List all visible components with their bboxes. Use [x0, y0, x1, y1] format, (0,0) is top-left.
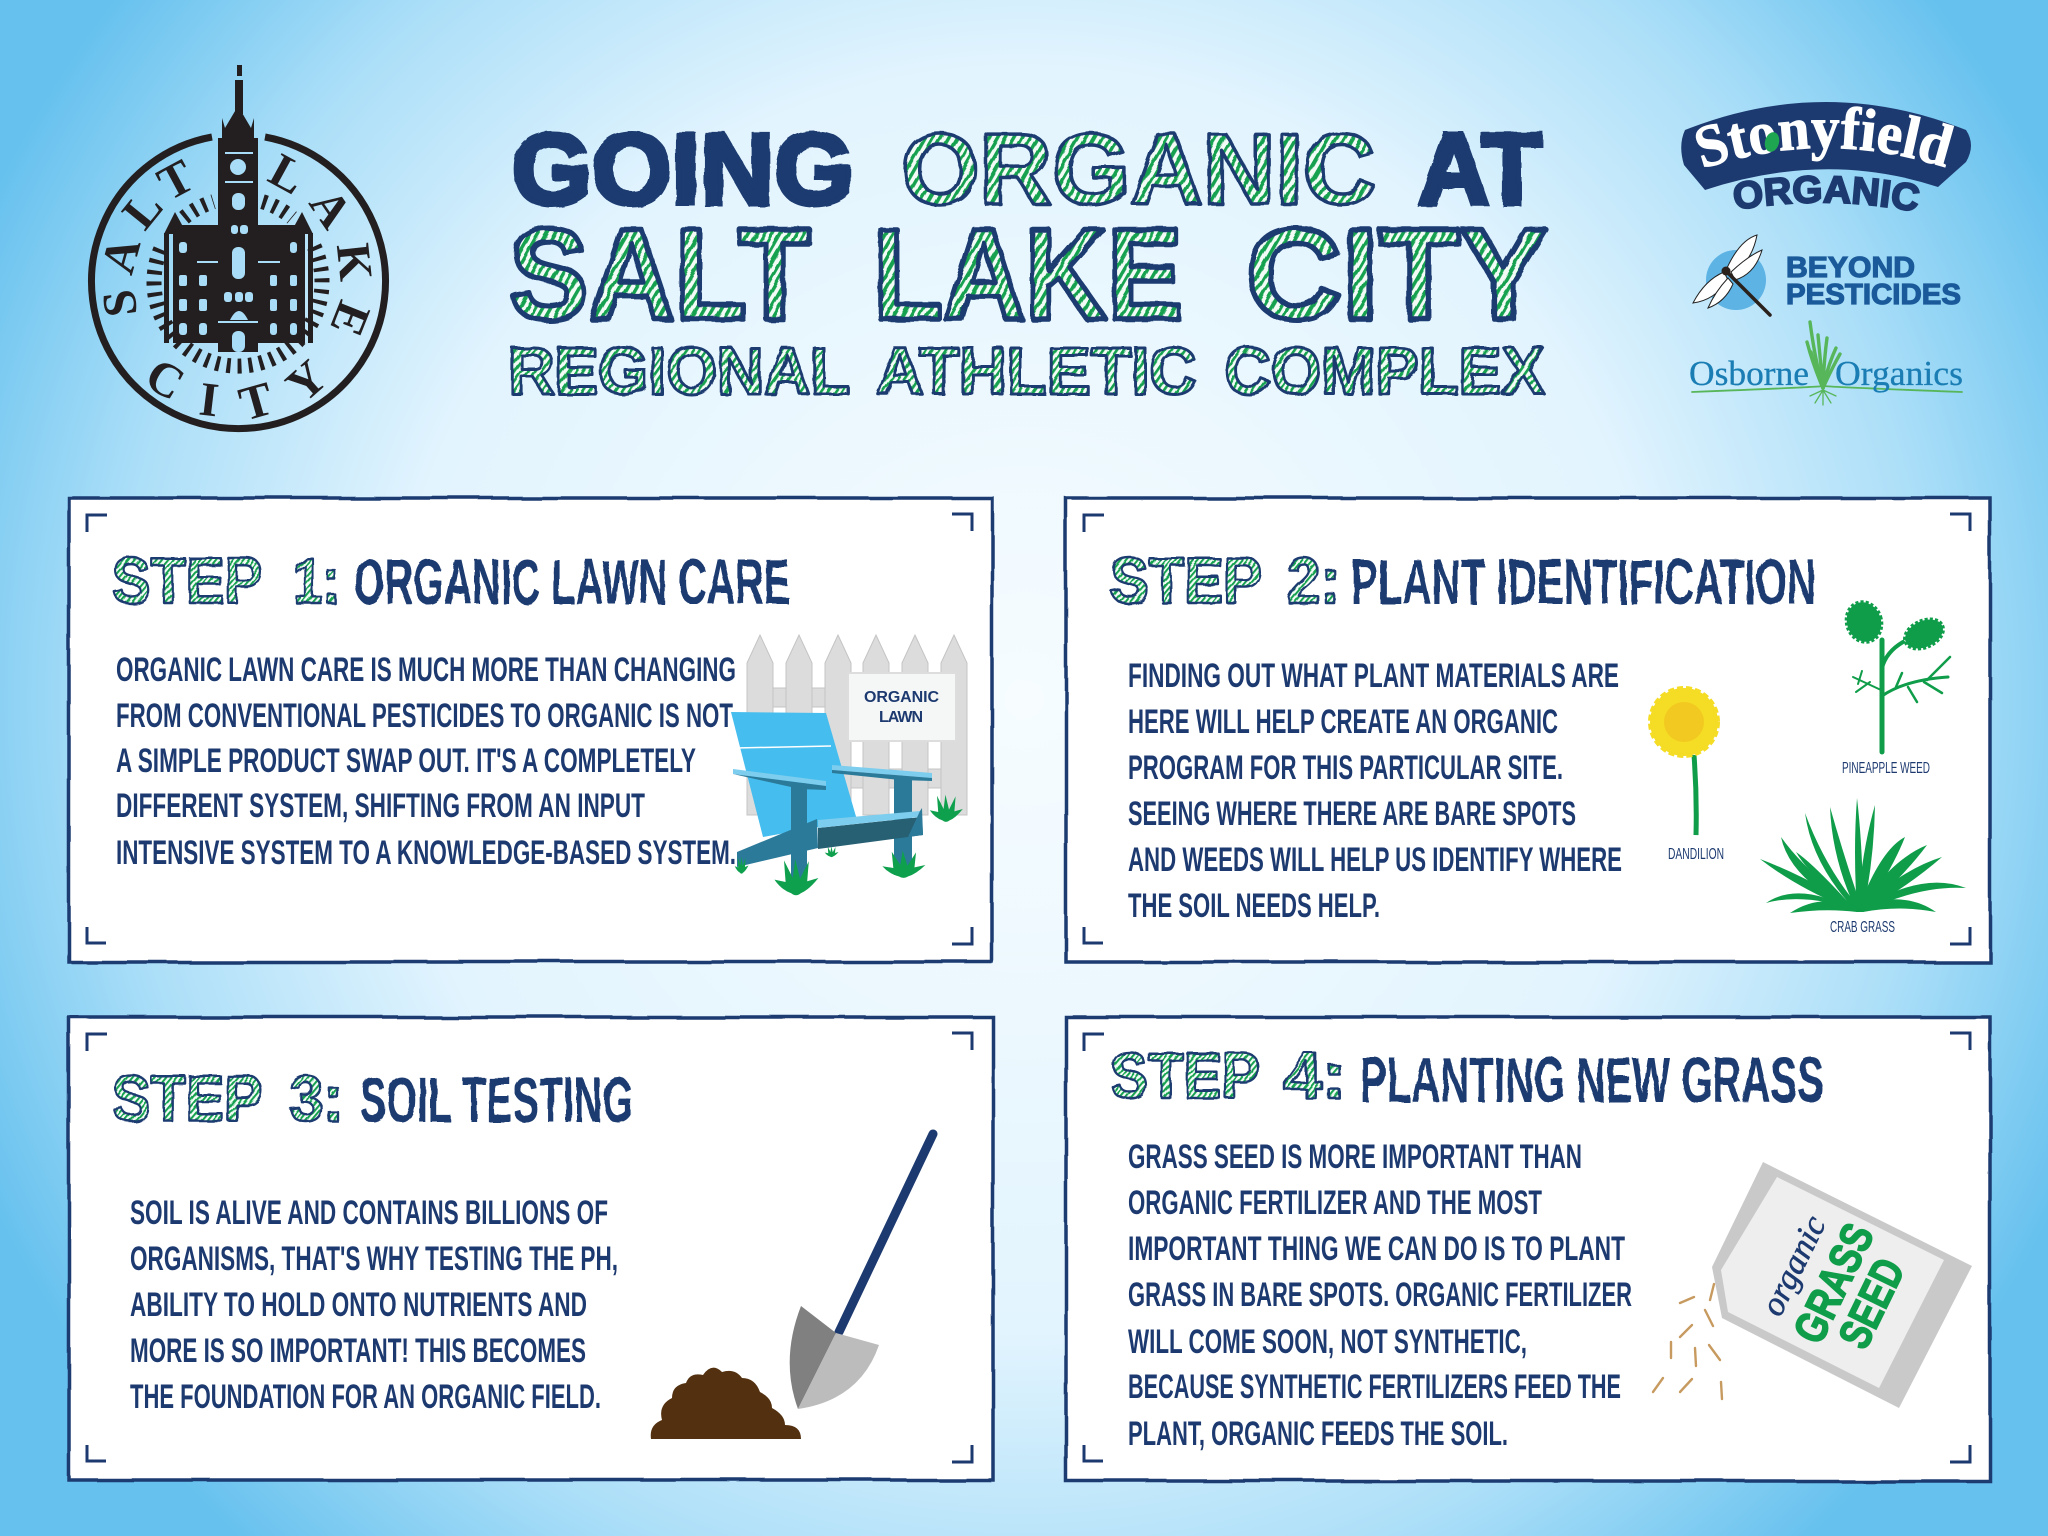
text block: step 1 body: A SIMPLE PRODUCT SWAP OUT. IT'S A COMPLETELY	[116, 742, 696, 780]
logo: Beyond Pesticides: PESTICIDES	[1786, 279, 1961, 311]
icon: grass seed bag	[1653, 1162, 1972, 1408]
icon: shovel	[790, 1134, 933, 1409]
text block: step 4 body	[1128, 1138, 1632, 1453]
text block: step 2 body: FINDING OUT WHAT PLANT MATERIALS ARE	[1128, 657, 1619, 695]
logo: Osborne Organics: Osborne	[1689, 354, 1809, 393]
icon: dragonfly	[1693, 235, 1770, 315]
logo: Beyond Pesticides	[1693, 235, 1961, 315]
title line 2	[509, 201, 1548, 347]
heading: step 2: 2:	[1287, 544, 1340, 617]
title line 2: SALT	[509, 201, 811, 347]
heading: step 3: STEP	[112, 1062, 263, 1135]
panel: step 1 organic lawn care	[69, 498, 992, 962]
heading: step 3	[112, 1062, 633, 1136]
heading: step 1: 1:	[293, 544, 340, 617]
logo: Osborne Organics	[1689, 322, 1963, 405]
text block: step 2 body: HERE WILL HELP CREATE AN ORGANIC	[1128, 703, 1558, 741]
text block: step 4 body: GRASS IN BARE SPOTS. ORGANIC FERTILIZER	[1128, 1276, 1632, 1314]
heading: step 1: STEP	[112, 544, 263, 617]
text block: step 1 body: INTENSIVE SYSTEM TO A KNOWLEDGE-BASED SYSTEM.	[116, 834, 736, 872]
text block: step 2 body: THE SOIL NEEDS HELP.	[1128, 887, 1380, 925]
text block: step 3 body: MORE IS SO IMPORTANT! THIS BECOMES	[130, 1332, 586, 1370]
text block: step 4 body: BECAUSE SYNTHETIC FERTILIZERS FEED THE	[1128, 1368, 1621, 1406]
icon: grass seed bag: organic	[1754, 1210, 1834, 1322]
title line 3	[508, 334, 1545, 409]
title line 3: ATHLETIC	[876, 334, 1197, 409]
logo: Salt Lake City seal: SALT	[104, 158, 191, 315]
heading: step 4: STEP	[1110, 1039, 1260, 1112]
text block: step 1 body: FROM CONVENTIONAL PESTICIDES TO ORGANIC IS NOT	[116, 697, 733, 735]
title	[508, 114, 1548, 409]
icon: crab grass	[1760, 798, 1966, 936]
title line 1: AT	[1418, 114, 1542, 226]
text block: step 3 body: ABILITY TO HOLD ONTO NUTRIENTS AND	[130, 1286, 587, 1324]
icon: adirondack chair and picket fence	[731, 635, 967, 895]
text block: step 2 body: AND WEEDS WILL HELP US IDENTIFY WHERE	[1128, 841, 1622, 879]
heading: step 3: SOIL TESTING	[360, 1064, 633, 1136]
heading: step 2	[1110, 544, 1816, 618]
icon: grass and roots	[1692, 322, 1962, 405]
logo: Salt Lake City seal: CITY	[149, 358, 324, 419]
text block: step 1 body	[116, 651, 736, 872]
panel: step 3 soil testing	[69, 1017, 993, 1480]
logo: Stonyfield Organic: ORGANIC	[1733, 175, 1920, 212]
sign: organic lawn: ORGANIC	[864, 689, 939, 706]
logo: Stonyfield Organic: Stonyfield	[1696, 106, 1954, 168]
text block: step 3 body: SOIL IS ALIVE AND CONTAINS BILLIONS OF	[130, 1194, 608, 1232]
text block: step 4 body: WILL COME SOON, NOT SYNTHETIC,	[1128, 1323, 1527, 1361]
icon: dandelion: DANDILION	[1668, 846, 1724, 863]
title line 3: REGIONAL	[508, 334, 850, 409]
text block: step 3 body	[130, 1194, 618, 1416]
logo: Stonyfield Organic	[1681, 102, 1971, 212]
panel: step 4 planting new grass	[1066, 1017, 1990, 1481]
text block: step 4 body: PLANT, ORGANIC FEEDS THE SOIL.	[1128, 1415, 1508, 1453]
text block: step 3 body: ORGANISMS, THAT'S WHY TESTING THE PH,	[130, 1240, 618, 1278]
heading: step 4	[1110, 1039, 1824, 1116]
heading: step 4: 4:	[1283, 1039, 1346, 1112]
icon: picket fence	[747, 635, 967, 815]
text block: step 2 body: PROGRAM FOR THIS PARTICULAR SITE.	[1128, 749, 1563, 787]
title line 1	[512, 114, 1542, 226]
heading: step 3: 3:	[289, 1062, 344, 1135]
text block: step 1 body: DIFFERENT SYSTEM, SHIFTING FROM AN INPUT	[116, 787, 645, 825]
logo: Beyond Pesticides: BEYOND	[1786, 252, 1915, 284]
title line 2: CITY	[1246, 201, 1548, 347]
icon: pineapple weed: PINEAPPLE WEED	[1842, 760, 1930, 777]
logo: Osborne Organics: Organics	[1835, 354, 1963, 393]
title line 1: ORGANIC	[901, 114, 1376, 226]
icon: grass seed bag: GRASS	[1783, 1215, 1884, 1351]
icon: crab grass: CRAB GRASS	[1830, 919, 1895, 936]
text block: step 2 body: SEEING WHERE THERE ARE BARE SPOTS	[1128, 795, 1576, 833]
title line 1: GOING	[512, 114, 854, 226]
text block: step 4 body: IMPORTANT THING WE CAN DO IS TO PLANT	[1128, 1230, 1625, 1268]
logo: Salt Lake City seal: LAKE	[266, 153, 372, 336]
text block: step 3 body: THE FOUNDATION FOR AN ORGANIC FIELD.	[130, 1378, 601, 1416]
icon: dandelion	[1650, 688, 1724, 863]
heading: step 1: ORGANIC LAWN CARE	[354, 546, 790, 618]
icon: chair	[731, 712, 932, 883]
icon: falling seeds	[1653, 1284, 1722, 1399]
icon: pineapple weed	[1842, 598, 1950, 777]
logo: Salt Lake City seal	[88, 65, 390, 432]
title line 3: COMPLEX	[1224, 334, 1545, 409]
icon: soil mound	[651, 1368, 801, 1439]
title line 2: LAKE	[873, 201, 1183, 347]
sign: organic lawn: LAWN	[879, 709, 923, 726]
text block: step 4 body: ORGANIC FERTILIZER AND THE MOST	[1128, 1184, 1542, 1222]
text block: step 1 body: ORGANIC LAWN CARE IS MUCH MORE THAN CHANGING	[116, 651, 736, 689]
panel: step 2 plant identification	[1066, 498, 1990, 962]
heading: step 1	[112, 544, 790, 618]
icon: grass seed bag: SEED	[1828, 1250, 1915, 1356]
heading: step 2: STEP	[1110, 544, 1262, 617]
sign: organic lawn	[848, 673, 956, 741]
text block: step 4 body: GRASS SEED IS MORE IMPORTANT THAN	[1128, 1138, 1582, 1176]
text block: step 2 body	[1128, 657, 1622, 925]
